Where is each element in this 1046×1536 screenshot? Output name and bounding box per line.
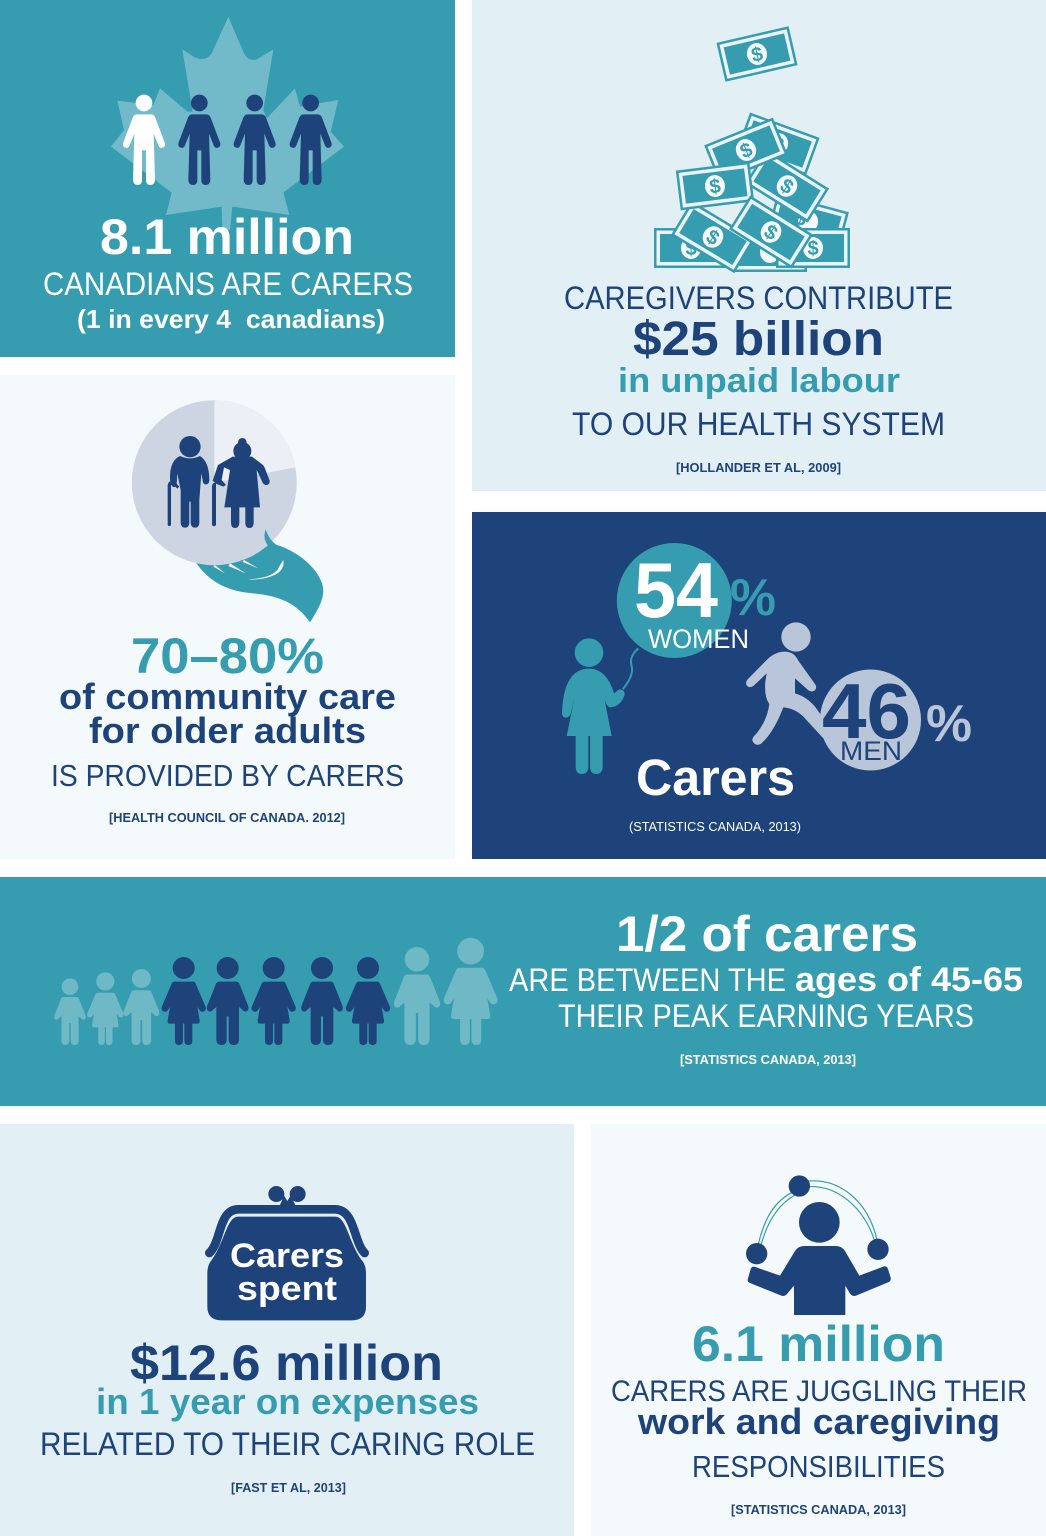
stat: percent men: % xyxy=(926,695,972,753)
text: to our health system: TO OUR HEALTH SYSTEM xyxy=(572,406,945,442)
icon: juggler xyxy=(746,1175,891,1315)
icon: row of people xyxy=(54,938,498,1045)
text: work and caregiving: work and caregiving xyxy=(637,1401,1000,1442)
icon: elderly couple xyxy=(168,436,270,528)
icon: pile of bills: $ xyxy=(760,221,781,245)
icon: pile of bills: $ xyxy=(708,175,722,199)
icon: pile of bills: $ xyxy=(685,238,697,260)
text: in unpaid labour: in unpaid labour xyxy=(618,362,900,400)
text: for older adults: for older adults xyxy=(89,710,366,751)
icon: man walking with circle xyxy=(746,622,921,770)
label: men: MEN xyxy=(840,736,902,766)
panel: half of carers xyxy=(0,877,1046,1106)
text: peak earning years: THEIR PEAK EARNING YEARS xyxy=(558,998,974,1034)
icon: woman with balloon xyxy=(562,543,732,774)
icon: pile of bills: $ xyxy=(737,139,756,163)
source: Statistics Canada: (STATISTICS CANADA, 2013) xyxy=(629,820,801,834)
pie chart xyxy=(132,400,297,565)
label: carers spent xyxy=(230,1237,344,1308)
label: carers spent: Carers xyxy=(230,1237,344,1275)
heading: carers: Carers xyxy=(636,749,795,806)
text: ages of 45-65: ages of 45-65 xyxy=(795,961,1023,999)
stat: 46: 46 xyxy=(822,667,911,755)
panel: 8.1 million carers xyxy=(0,0,455,357)
text: caregivers contribute: CAREGIVERS CONTRIBUTE xyxy=(564,280,953,316)
icon: pile of bills: $ xyxy=(702,226,723,250)
text: 1 in every 4: (1 in every 4 canadians) xyxy=(77,304,385,334)
source: Hollander: [HOLLANDER ET AL, 2009] xyxy=(676,461,841,475)
icon: pile of bills: $ xyxy=(807,238,819,260)
heading: $12.6 million: $12.6 million xyxy=(130,1335,443,1391)
text: Canadians are carers: CANADIANS ARE CARERS xyxy=(43,266,413,302)
icon: pile of bills: $ xyxy=(769,133,787,157)
source: Statistics Canada: [STATISTICS CANADA, 2013] xyxy=(731,1503,906,1517)
heading: 1/2 of carers: 1/2 of carers xyxy=(616,906,918,962)
icon: hand thumb xyxy=(264,529,320,580)
stat: percent women: % xyxy=(730,569,776,627)
panel: 6.1 million juggling xyxy=(591,1124,1046,1536)
icon: falling bill xyxy=(716,26,798,82)
icon: maple leaf xyxy=(111,17,344,230)
text: are between the: ARE BETWEEN THE xyxy=(509,962,786,998)
panel: women and men carers xyxy=(472,512,1046,859)
source: Health Council: [HEALTH COUNCIL OF CANADA. 2012] xyxy=(109,811,345,825)
icon: coin purse xyxy=(207,1186,366,1320)
panel: $25 billion xyxy=(472,0,1046,491)
icon: pile of bills xyxy=(654,113,850,273)
heading: $25 billion: $25 billion xyxy=(633,313,884,366)
panel: 70-80% community care xyxy=(0,375,455,859)
text: responsibilities: RESPONSIBILITIES xyxy=(692,1449,945,1484)
text: of community care: of community care xyxy=(59,676,396,717)
label: carers spent: spent xyxy=(237,1270,337,1308)
icon: pile of bills: $ xyxy=(792,207,809,231)
stat: 54: 54 xyxy=(634,546,718,634)
text: in 1 year on expenses: in 1 year on expenses xyxy=(96,1381,479,1422)
panel: $12.6 million expenses xyxy=(0,1124,574,1536)
text: related to caring role: RELATED TO THEIR CARING ROLE xyxy=(40,1426,535,1462)
icon: pile of bills: $ xyxy=(776,175,797,199)
label: women: WOMEN xyxy=(648,624,749,654)
text: is provided by carers: IS PROVIDED BY CARERS xyxy=(51,758,404,793)
source: Fast et al: [FAST ET AL, 2013] xyxy=(231,1481,346,1495)
heading: 8.1 million: 8.1 million xyxy=(100,209,354,265)
icon: four people xyxy=(123,95,332,185)
icon: caring hand xyxy=(196,529,323,622)
heading: 70-80%: 70–80% xyxy=(131,628,324,684)
source: Statistics Canada: [STATISTICS CANADA, 2013] xyxy=(680,1053,856,1067)
icon: falling bill: $ xyxy=(749,43,765,67)
heading: 6.1 million: 6.1 million xyxy=(692,1316,945,1372)
